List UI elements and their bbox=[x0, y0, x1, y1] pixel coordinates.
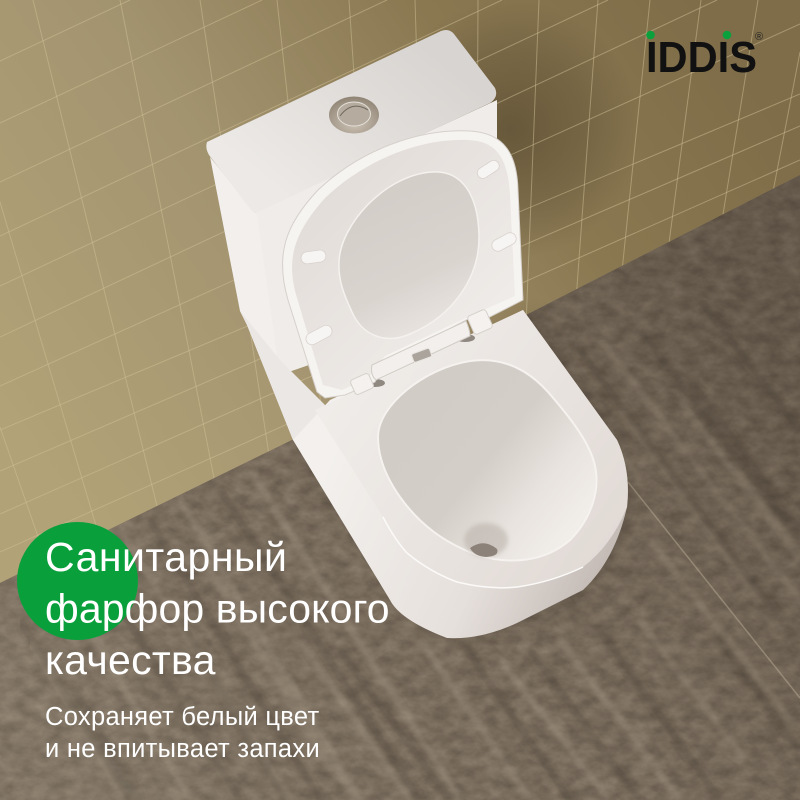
seat bumper bbox=[300, 249, 327, 265]
logo dot bbox=[646, 31, 655, 39]
registered mark: ® bbox=[755, 31, 763, 43]
pedestal bbox=[240, 311, 330, 470]
open toilet seat bbox=[282, 131, 523, 398]
floor light falloff bbox=[0, 170, 800, 800]
logo dot bbox=[723, 31, 731, 39]
bowl rim bbox=[315, 310, 628, 588]
toilet bbox=[206, 30, 630, 638]
subheading: и не впитывает запахи bbox=[45, 735, 320, 763]
rim edge highlight bbox=[383, 517, 583, 588]
hinge left bbox=[350, 373, 374, 395]
seat bumper bbox=[490, 231, 518, 253]
stone floor bbox=[0, 170, 800, 800]
hinge clip bbox=[411, 348, 432, 363]
hinge bar bbox=[372, 321, 470, 380]
seat bumper bbox=[475, 158, 501, 181]
green circle accent bbox=[17, 522, 138, 640]
seat hinge bolts bbox=[365, 334, 475, 387]
bowl interior bbox=[378, 360, 597, 560]
cistern lid bbox=[206, 30, 496, 212]
lid recess bbox=[339, 172, 479, 338]
logo IDDIS bbox=[646, 31, 763, 82]
drain bbox=[470, 543, 498, 557]
seat underside bbox=[292, 140, 515, 390]
floor texture bbox=[0, 170, 800, 800]
cistern side face bbox=[210, 157, 300, 440]
bowl skirt bbox=[293, 310, 628, 638]
cistern front face bbox=[255, 100, 497, 375]
seat outer edge bbox=[282, 131, 523, 398]
floor dark streaks bbox=[20, 300, 800, 800]
logo wordmark: IDDIS bbox=[646, 33, 757, 82]
heading: Санитарный bbox=[45, 534, 287, 580]
tiled wall bbox=[0, 0, 800, 600]
drain shadow bbox=[464, 523, 508, 557]
shadow on wall behind tank bbox=[458, 26, 614, 236]
seat bumper bbox=[304, 323, 334, 347]
floor light streaks bbox=[30, 340, 800, 800]
tile grout lines bbox=[0, 0, 800, 600]
heading: фарфор высокого bbox=[45, 586, 390, 632]
slab seam bbox=[628, 482, 800, 698]
hinge right bbox=[467, 309, 493, 335]
contact shadow bbox=[300, 315, 630, 635]
flush button bbox=[329, 96, 379, 134]
heading: качества bbox=[45, 637, 216, 683]
subheading: Сохраняет белый цвет bbox=[45, 703, 320, 731]
